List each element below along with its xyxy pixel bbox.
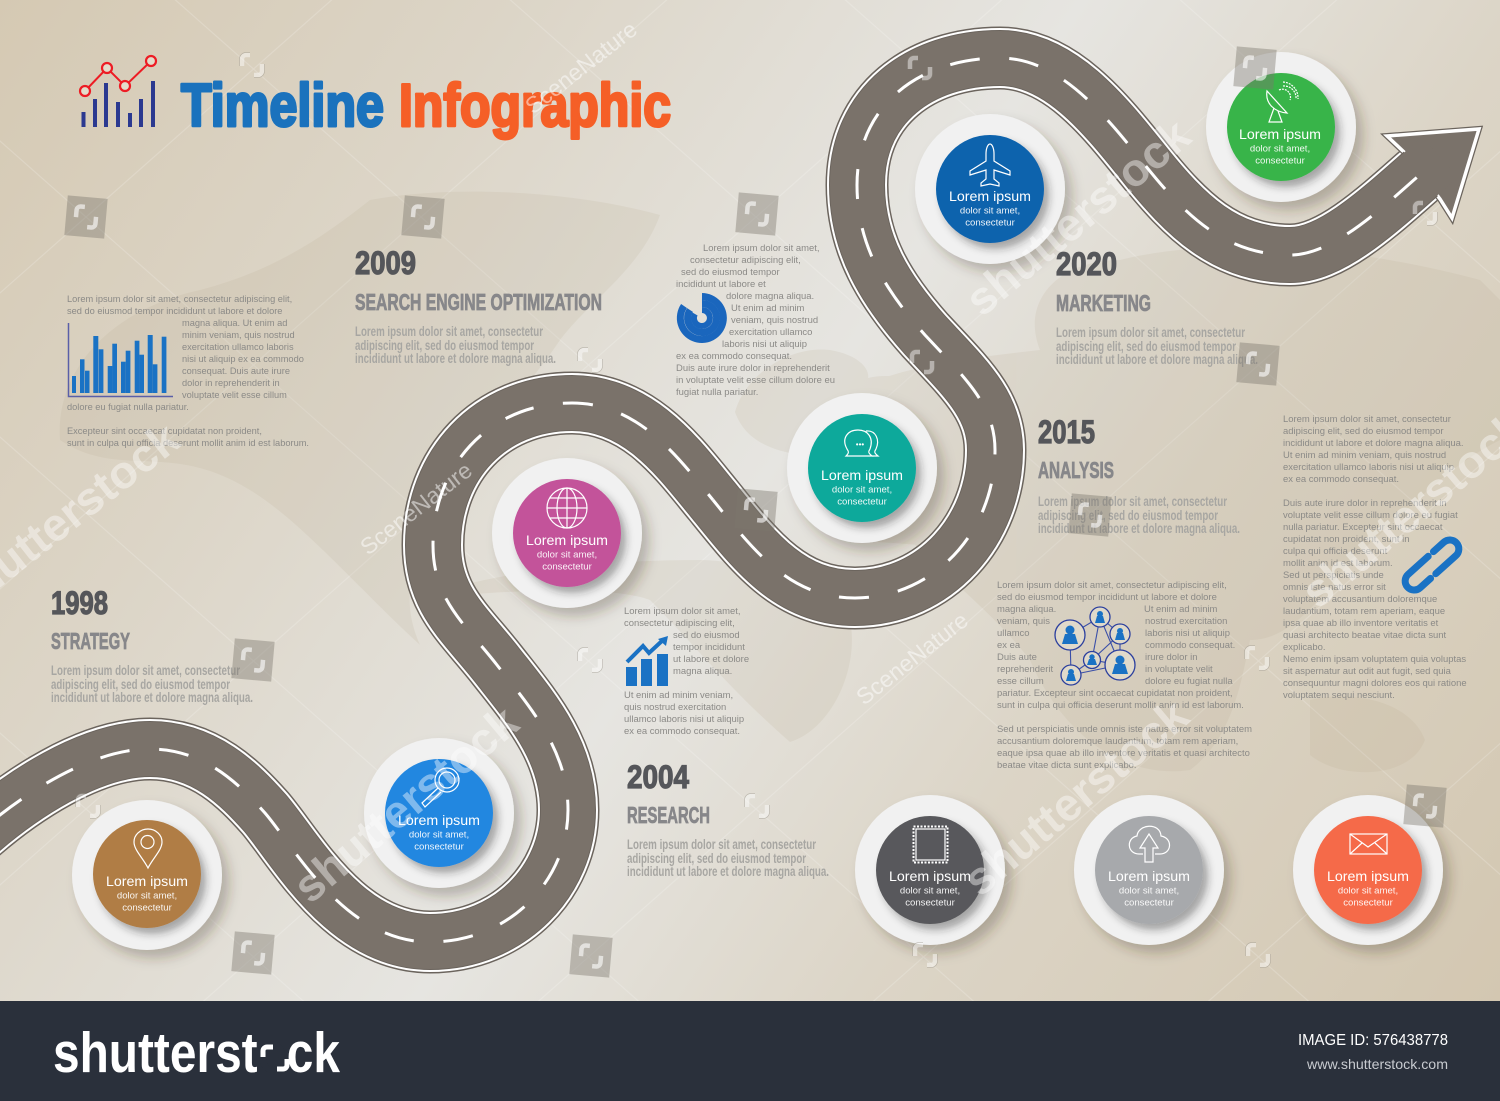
- text block with pie icon: ex ea commodo consequat.: [676, 351, 792, 362]
- circle: 2004 search: dolor sit amet,: [409, 830, 469, 840]
- text block with growth chart: magna aliqua.: [673, 666, 732, 677]
- circle: 2015 speech: Lorem ipsum: [821, 468, 903, 484]
- milestone 2004 research: incididunt ut labore et dolore magna aliqua.: [627, 864, 829, 879]
- text block with link icon: Sed ut perspiciatis unde: [1283, 570, 1384, 581]
- text block with link icon: sit aspernatur aut odit aut fugit, sed quia: [1283, 666, 1452, 677]
- text block with link icon: quasi architecto beatae vitae dicta sunt: [1283, 630, 1447, 641]
- winding road with arrow: [0, 58, 1479, 942]
- circle: 1998 location: dolor sit amet,: [117, 890, 177, 902]
- milestone 2020 marketing: MARKETING: [1056, 290, 1151, 316]
- text block with link icon: explicabo.: [1283, 642, 1326, 653]
- circle: 2015 speech: consectetur: [837, 496, 888, 508]
- circle: 2009 globe: consectetur: [542, 562, 593, 572]
- circle: 2015 speech: dolor sit amet,: [832, 484, 892, 496]
- text block with network icon: Lorem ipsum dolor sit amet, consectetur adipiscing elit,: [997, 580, 1227, 591]
- text block with network icon: beatae vitae dicta sunt explicabo.: [997, 760, 1137, 771]
- text block with pie icon: [676, 243, 835, 398]
- bar chart: [68, 323, 173, 396]
- text block with link icon: consequuntur magni dolores eos qui ratione: [1283, 678, 1467, 689]
- milestone 2009 seo: Lorem ipsum dolor sit amet, consectetur: [355, 324, 544, 339]
- circle: satellite dish: dolor sit amet,: [1250, 144, 1310, 154]
- circle: 1998 location: Lorem ipsum: [106, 874, 188, 890]
- text block with link icon: voluptatem sequi nesciunt.: [1283, 690, 1395, 701]
- text block with link icon: voluptate velit esse cillum dolore eu fugiat: [1283, 510, 1458, 521]
- milestone 2015 analysis: ANALYSIS: [1038, 457, 1114, 483]
- circle: chip: consectetur: [905, 898, 956, 908]
- footer logo: shutterstock: [53, 1021, 340, 1085]
- milestone 2009 seo: [355, 245, 602, 366]
- text block with link icon: incididunt ut labore et dolore magna aliqua.: [1283, 438, 1463, 449]
- text block with bar chart: dolor in reprehenderit in: [182, 378, 280, 388]
- text block with link icon: Duis aute irure dolor in reprehenderit in: [1283, 498, 1447, 509]
- text block with bar chart: Lorem ipsum dolor sit amet, consectetur adipiscing elit,: [67, 294, 292, 304]
- milestone 2020 marketing: incididunt ut labore et dolore magna aliqua.: [1056, 352, 1258, 367]
- circle: envelope: consectetur: [1343, 898, 1394, 908]
- text block with growth chart: Lorem ipsum dolor sit amet,: [624, 606, 740, 617]
- text block with pie icon: dolore magna aliqua.: [726, 291, 814, 302]
- text block with pie icon: Duis aute irure dolor in reprehenderit: [676, 363, 830, 374]
- text block with pie icon: veniam, quis nostrud: [731, 315, 818, 326]
- circle: 2004 search: [364, 738, 514, 888]
- text block with network icon: Duis aute: [997, 652, 1037, 663]
- milestone 2015 analysis: [1038, 414, 1240, 536]
- milestone 2004 research: adipiscing elit, sed do eiusmod tempor: [627, 851, 807, 866]
- circle: cloud upload: [1074, 795, 1224, 945]
- text block with bar chart: [67, 294, 309, 448]
- text block with bar chart: magna aliqua. Ut enim ad: [182, 318, 287, 328]
- milestone 2009 seo: incididunt ut labore et dolore magna aliqua.: [355, 351, 556, 366]
- milestone 2020 marketing: Lorem ipsum dolor sit amet, consectetur: [1056, 325, 1246, 340]
- circle: 1998 location: [72, 800, 222, 950]
- circle: envelope: Lorem ipsum: [1327, 869, 1409, 885]
- text block with bar chart: sed do eiusmod tempor incididunt ut labore et dolore: [67, 306, 282, 316]
- text block with network icon: Ut enim ad minim: [1144, 604, 1218, 615]
- text block with pie icon: in voluptate velit esse cillum dolore eu: [676, 375, 835, 386]
- circle: envelope: [1293, 795, 1443, 945]
- text block with growth chart: sed do eiusmod: [673, 630, 740, 641]
- radial chart icon: [680, 296, 723, 339]
- circle: 2009 globe: dolor sit amet,: [537, 550, 597, 560]
- watermark text: shutterstock: [283, 695, 528, 913]
- text block with link icon: exercitation ullamco laboris nisi ut aliquip: [1283, 462, 1454, 473]
- text block with network icon: sed do eiusmod tempor incididunt ut labore et dolore: [997, 592, 1217, 603]
- text block with link icon: omnis iste natus error sit: [1283, 582, 1386, 593]
- title: [181, 72, 671, 139]
- text block with link icon: Lorem ipsum dolor sit amet, consectetur: [1283, 414, 1451, 425]
- circle: satellite dish: consectetur: [1255, 156, 1306, 166]
- text block with growth chart: ut labore et dolore: [673, 654, 749, 665]
- text block with link icon: laudantium, totam rem aperiam, eaque: [1283, 606, 1445, 617]
- watermark text: SceneNature: [851, 607, 973, 710]
- milestone 2020 marketing: [1056, 246, 1258, 367]
- title: Infographic: [399, 72, 671, 139]
- text block with growth chart: consectetur adipiscing elit,: [624, 618, 735, 629]
- growth chart icon: [626, 636, 668, 686]
- milestone 2009 seo: 2009: [355, 245, 416, 281]
- milestone 1998 strategy: 1998: [51, 585, 108, 621]
- milestone 1998 strategy: Lorem ipsum dolor sit amet, consectetur: [51, 663, 241, 678]
- title chart icon: [80, 56, 156, 127]
- text block with network icon: [997, 580, 1252, 771]
- watermark text: shutterstock: [955, 108, 1200, 326]
- title: Timeline: [181, 72, 384, 139]
- text block with network icon: Sed ut perspiciatis unde omnis iste natus error sit voluptatem: [997, 724, 1252, 735]
- circle: cloud upload: Lorem ipsum: [1108, 869, 1190, 885]
- text block with growth chart: ullamco laboris nisi ut aliquip: [624, 714, 744, 725]
- milestone 1998 strategy: adipiscing elit, sed do eiusmod tempor: [51, 677, 231, 692]
- milestone 2015 analysis: Lorem ipsum dolor sit amet, consectetur: [1038, 494, 1228, 509]
- text block with link icon: culpa qui officia deserunt: [1283, 546, 1388, 557]
- text block with pie icon: sed do eiusmod tempor: [681, 267, 780, 278]
- milestone 1998 strategy: [51, 585, 253, 705]
- text block with pie icon: incididunt ut labore et: [676, 279, 766, 290]
- text block with link icon: voluptatem accusantium doloremque: [1283, 594, 1437, 605]
- milestone 2004 research: 2004: [627, 759, 689, 795]
- circle: chip: Lorem ipsum: [889, 869, 971, 885]
- milestone 2004 research: RESEARCH: [627, 802, 710, 828]
- text block with link icon: nulla pariatur. Excepteur sint occaecat: [1283, 522, 1443, 533]
- text block with growth chart: ex ea commodo consequat.: [624, 726, 740, 737]
- circle: 2009 globe: Lorem ipsum: [526, 533, 608, 549]
- text block with network icon: veniam, quis: [997, 616, 1050, 627]
- text block with network icon: eaque ipsa quae ab illo inventore veritatis et quasi architecto: [997, 748, 1250, 759]
- circle: satellite dish: [1206, 52, 1356, 202]
- milestone 2004 research: Lorem ipsum dolor sit amet, consectetur: [627, 837, 817, 852]
- circle: chip: [855, 795, 1005, 945]
- text block with bar chart: sunt in culpa qui officia deserunt mollit anim id est laborum.: [67, 438, 309, 448]
- watermark text: SceneNature: [520, 16, 642, 119]
- text block with link icon: adipiscing elit, sed do eiusmod tempor: [1283, 426, 1444, 437]
- text block with link icon: mollit anim id est laborum.: [1283, 558, 1393, 569]
- text block with link icon: Nemo enim ipsam voluptatem quia voluptas: [1283, 654, 1466, 665]
- text block with bar chart: voluptate velit esse cillum: [182, 390, 287, 400]
- footer url: www.shutterstock.com: [1306, 1056, 1448, 1072]
- circle: 2015 speech: •••: [856, 440, 864, 449]
- text block with network icon: ullamco: [997, 628, 1030, 639]
- circle: satellite dish: Lorem ipsum: [1239, 127, 1321, 143]
- text block with network icon: commodo consequat.: [1145, 640, 1235, 651]
- circle: 2020 plane: [915, 114, 1065, 264]
- text block with bar chart: dolore eu fugiat nulla pariatur.: [67, 402, 189, 412]
- text block with network icon: reprehenderit: [997, 664, 1054, 675]
- circle: cloud upload: dolor sit amet,: [1119, 886, 1179, 896]
- link icon: [1401, 536, 1463, 594]
- text block with link icon: ipsa quae ab illo inventore veritatis et: [1283, 618, 1439, 629]
- text block with network icon: ex ea: [997, 640, 1021, 651]
- text block with network icon: irure dolor in: [1145, 652, 1197, 663]
- milestone 2020 marketing: adipiscing elit, sed do eiusmod tempor: [1056, 339, 1237, 354]
- watermark text: shutterstock: [953, 688, 1198, 906]
- circle: 2009 globe: [492, 458, 642, 608]
- text block with network icon: nostrud exercitation: [1145, 616, 1227, 627]
- circle: envelope: dolor sit amet,: [1338, 886, 1398, 896]
- text block with network icon: laboris nisi ut aliquip: [1145, 628, 1230, 639]
- text block with pie icon: exercitation ullamco: [729, 327, 812, 338]
- text block with pie icon: Ut enim ad minim: [731, 303, 805, 314]
- text block with network icon: pariatur. Excepteur sint occaecat cupidatat non proident,: [997, 688, 1233, 699]
- watermark stamps: [64, 46, 1447, 978]
- milestone 1998 strategy: incididunt ut labore et dolore magna aliqua.: [51, 690, 253, 705]
- text block with growth chart: tempor incididunt: [673, 642, 745, 653]
- milestone 2009 seo: adipiscing elit, sed do eiusmod tempor: [355, 338, 535, 353]
- circle: 1998 location: consectetur: [122, 902, 173, 914]
- text block with growth chart: [624, 606, 749, 737]
- text block with network icon: in voluptate velit: [1145, 664, 1213, 675]
- circle: cloud upload: consectetur: [1124, 898, 1175, 908]
- text block with link icon: ex ea commodo consequat.: [1283, 474, 1399, 485]
- footer bar: [0, 1001, 1500, 1101]
- footer image id: IMAGE ID: 576438778: [1298, 1032, 1448, 1049]
- circle: 2015 speech: [787, 393, 937, 543]
- circle: chip: dolor sit amet,: [900, 886, 960, 896]
- text block with network icon: accusantium doloremque laudantium, totam rem aperiam,: [997, 736, 1238, 747]
- text block with network icon: sunt in culpa qui officia deserunt mollit anim id est laborum.: [997, 700, 1244, 711]
- world map silhouette: [60, 192, 1500, 772]
- circle: 2020 plane: Lorem ipsum: [949, 189, 1031, 205]
- text block with network icon: dolore eu fugiat nulla: [1145, 676, 1233, 687]
- text block with pie icon: Lorem ipsum dolor sit amet,: [703, 243, 819, 254]
- watermark text: SceneNature: [355, 457, 477, 560]
- text block with network icon: esse cillum: [997, 676, 1044, 687]
- text block with bar chart: minim veniam, quis nostrud: [182, 330, 295, 340]
- milestone 2015 analysis: 2015: [1038, 414, 1095, 450]
- circle: 2004 search: consectetur: [414, 842, 465, 852]
- text block with pie icon: consectetur adipiscing elit,: [690, 255, 801, 266]
- text block with growth chart: quis nostrud exercitation: [624, 702, 726, 713]
- circle: 2004 search: Lorem ipsum: [398, 813, 480, 829]
- milestone 2020 marketing: 2020: [1056, 246, 1117, 282]
- text block with network icon: magna aliqua.: [997, 604, 1056, 615]
- milestone 2009 seo: SEARCH ENGINE OPTIMIZATION: [355, 289, 602, 315]
- arrow head: [1387, 129, 1479, 218]
- circle: 2020 plane: dolor sit amet,: [960, 206, 1020, 216]
- text block with bar chart: exercitation ullamco laboris: [182, 342, 294, 352]
- milestone 1998 strategy: STRATEGY: [51, 628, 130, 654]
- milestone 2004 research: [627, 759, 829, 879]
- text block with bar chart: Excepteur sint occaecat cupidatat non proident,: [67, 426, 262, 436]
- text block with pie icon: laboris nisi ut aliquip: [722, 339, 807, 350]
- circle: 2020 plane: consectetur: [965, 218, 1016, 228]
- text block with link icon: cupidatat non proident, sunt in: [1283, 534, 1409, 545]
- text block with growth chart: Ut enim ad minim veniam,: [624, 690, 733, 701]
- milestone 2015 analysis: incididunt ut labore et dolore magna aliqua.: [1038, 521, 1240, 536]
- network icon: [1055, 607, 1135, 685]
- text block with link icon: [1283, 414, 1467, 701]
- text block with link icon: Ut enim ad minim veniam, quis nostrud: [1283, 450, 1446, 461]
- milestone 2015 analysis: adipiscing elit, sed do eiusmod tempor: [1038, 508, 1219, 523]
- text block with bar chart: consequat. Duis aute irure: [182, 366, 290, 376]
- text block with pie icon: fugiat nulla pariatur.: [676, 387, 758, 398]
- text block with bar chart: nisi ut aliquip ex ea commodo: [182, 354, 304, 364]
